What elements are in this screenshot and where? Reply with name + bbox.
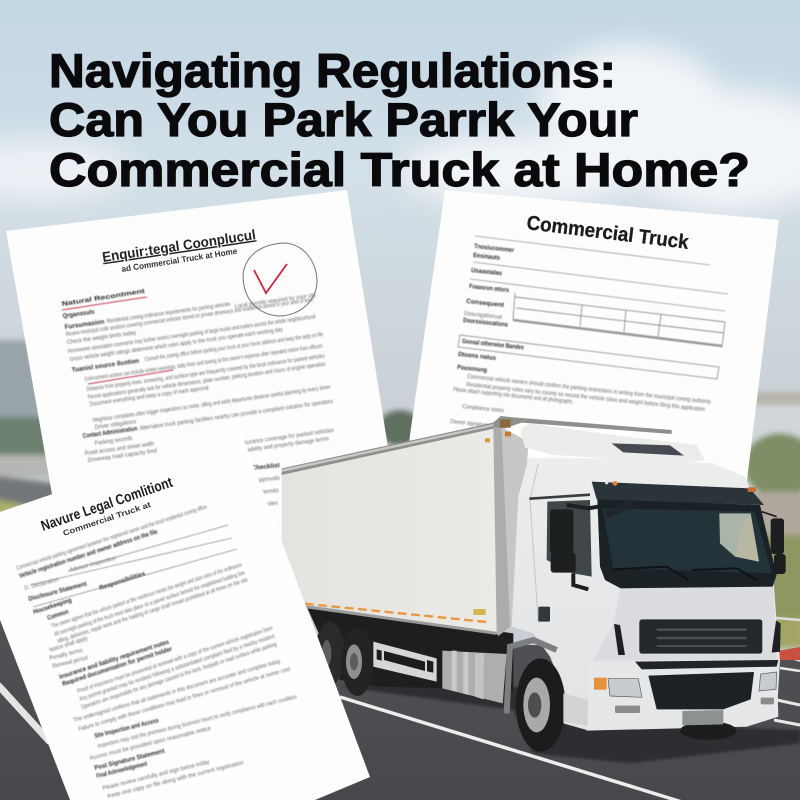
fuel tanks <box>442 651 507 703</box>
body text: sheet clauses: Disclosure Statement <box>28 580 88 603</box>
body text: sheet clauses: Renewal period <box>52 655 88 670</box>
form: rules, labels and table: Commercial vehicle owners should confirm the parking restrictions in writing from the municipal zoning authority <box>467 374 711 406</box>
body text: sheet clauses: Liability and property damage terms <box>244 436 329 454</box>
truck shadow on road <box>340 680 800 763</box>
form: rules, labels and table: Dtoens natus <box>458 351 497 362</box>
body text: sheet clauses <box>16 504 297 800</box>
body text: sheet clauses: Post Signature Statement <box>94 748 166 772</box>
body text: sheet clauses: Checklist <box>251 462 281 472</box>
body text: sheet clauses: Common <box>46 608 70 622</box>
form: rules, labels and table <box>450 236 728 430</box>
body text: sheet clauses: Keep one copy on file along with the current registration <box>107 760 244 800</box>
windshield <box>597 498 777 588</box>
subheading: Commercial Truck at <box>62 500 152 538</box>
upper grille <box>614 619 781 655</box>
title: Commercial Truck at Home? <box>49 143 750 196</box>
document: top left compliance sheet <box>6 190 420 610</box>
form: rules, labels and table: Usaastalas <box>471 267 503 277</box>
body text: sheet clauses: Gross vehicle weight ratings determine which rules apply to the truck you operate each working day <box>69 327 283 363</box>
body text: sheet clauses: Alternative truck parking facilities nearby can provide a compliant solution for operators <box>139 399 333 432</box>
body text: sheet clauses: Please review carefully and sign below today <box>102 760 210 792</box>
cab front panel <box>593 584 777 661</box>
body text: sheet clauses: Site Inspection and Access <box>94 717 160 740</box>
body text: sheet clauses: Commercial vehicle parking agreement between the registered owner and the local residential zoning office <box>16 504 208 572</box>
body text: sheet clauses: Notice shall apply <box>49 636 89 654</box>
body text: sheet clauses: Idling, deliveries, repair work and the loading of cargo shall remain prohibited at all times on the site <box>57 577 249 645</box>
body text: sheet clauses: Inspectors may visit the premises during business hours to verify compliance with each condition <box>97 695 297 750</box>
body text: sheet clauses: D. Declaration <box>24 577 59 592</box>
body text: sheet clauses: Homeowner association covenants may further restrict overnight parking of large trucks and trailers across the whole neighbourhood <box>67 314 316 355</box>
body text: sheet clauses: Housekeeping <box>32 597 73 616</box>
body text: sheet clauses: Contact Administration <box>82 425 138 440</box>
form: rules, labels and table: Tnosiucommer <box>474 243 515 254</box>
sun visor with marker lights <box>592 481 764 505</box>
body text: sheet clauses: Access must be provided upon reasonable notice <box>89 726 212 762</box>
body text: sheet clauses: Operators are responsible for any damage caused to the kerb, footpath or road surface while parking <box>81 642 278 711</box>
body text: sheet clauses: Insurance coverage for parked vehicles <box>239 428 334 447</box>
background: distant hills, trees and roadside <box>0 340 800 648</box>
body text: sheet clauses: Parking records <box>94 436 133 447</box>
headlights, fog lamps and number plate <box>587 667 778 740</box>
form: rules, labels and table: Residential property rules vary by county so record the vehicle class and weight before filing this application <box>466 382 705 413</box>
body text: sheet clauses: Road access and street width <box>84 441 155 457</box>
body text: sheet clauses: Responsibilities <box>98 570 147 592</box>
body text: sheet clauses: Final Acknowledgement <box>96 760 148 780</box>
front wheel <box>507 640 565 752</box>
body text: sheet clauses: Notes <box>264 501 278 508</box>
body text: sheet clauses: Proof of insurance must be presented at renewal with a copy of the current vehicle registration form <box>77 626 274 695</box>
title: Can You Park Parrk Your <box>49 93 638 146</box>
form: rules, labels and table: Pousonung <box>457 364 487 374</box>
cab body <box>512 458 780 730</box>
truck: white commercial box truck <box>282 416 800 763</box>
table <box>513 293 725 347</box>
form: rules, labels and table: Owner signature date <box>450 419 501 430</box>
front bumper <box>563 660 778 731</box>
form: rules, labels and table: Compliance notes <box>462 404 504 414</box>
road <box>0 618 800 800</box>
body text: sheet clauses: Natural Recontment <box>61 288 146 308</box>
roof air deflector <box>521 424 705 462</box>
body text: sheet clauses: Required documentation for permit holder <box>61 646 173 688</box>
body text: sheet clauses: Fursumasion <box>64 318 105 331</box>
body text: sheet clauses: Permit applications generally ask for vehicle dimensions, plate number, parking location and hours of engine operation <box>87 362 326 401</box>
body text: sheet clauses: The undersigned confirms that all statements in this document are accurate and complete today <box>73 659 281 724</box>
cab door seam and trim <box>529 463 590 623</box>
form: rules, labels and table: Consequent <box>466 298 505 309</box>
body text: sheet clauses: Neighbour complaints often trigger inspections so noise, idling and early departures deserve careful planning by every driver <box>92 385 331 424</box>
body text: sheet clauses: Document everything and keep a copy of each approval <box>89 385 209 408</box>
body text: sheet clauses: Penalty terms <box>49 648 83 662</box>
body text: sheet clauses: Consult the zoning office before parking your truck at your home address and keep the reply on file <box>144 332 324 363</box>
body text: sheet clauses: Failure to comply with these conditions may lead to fines or removal of the vehicle at owner cost <box>78 666 291 733</box>
form: rules, labels and table: Please attach supporting site documents and all photographs <box>453 387 573 406</box>
cargo box <box>282 416 672 636</box>
body text: sheet clauses: Driver obligations <box>94 419 137 431</box>
side window and mirror <box>547 500 627 589</box>
heading: sheet title: Navure Legal Comlitiont <box>39 475 175 535</box>
form: rules, labels and table: Dsorssisocations <box>463 317 509 329</box>
body text: sheet clauses: Review municipal code sections covering commercial vehicles stored on private driveways and residential streets in your area of town <box>65 297 314 338</box>
body text: sheet clauses: The owner agrees that the vehicle parked at the residence meets the weight and size rules of the ordinance <box>51 562 243 630</box>
document: top right commercial truck form <box>400 190 779 540</box>
subheading: ad Commercial Truck at Home <box>121 246 238 274</box>
body text: sheet clauses: Tuanisl source Ilustion <box>71 358 140 374</box>
form: rules, labels and table: Foaasrun ottors <box>469 283 510 294</box>
right mirror <box>762 512 786 574</box>
body text: sheet clauses: Distance from property lines, screening, and surface type are frequently covered by the local ordinance for parked vehicles <box>86 354 325 393</box>
heading: sheet title: Enquir:tegal Coonplucul <box>101 226 257 265</box>
body text: sheet clauses <box>61 288 334 508</box>
title: Navigating Regulations: <box>49 44 616 97</box>
rear wheels <box>315 622 373 696</box>
form: rules, labels and table: Doscrigationsat <box>464 311 503 321</box>
body text: sheet clauses: Residential zoning ordinance requirements for parking vehicles <box>106 302 231 325</box>
body text: sheet clauses: Local permits required by your city <box>234 293 316 310</box>
body text: sheet clauses: All overnight parking of the truck must take place on a paved surface behind the established building line <box>54 570 246 638</box>
title <box>49 44 750 196</box>
body text: sheet clauses: Permits <box>260 488 279 496</box>
chassis underside <box>307 607 513 690</box>
body text: sheet clauses: Vehicle registration number and owner address on the file <box>18 528 159 580</box>
icon: circled red check mark <box>243 243 317 316</box>
heading: form title: Commercial Truck <box>525 212 691 254</box>
body text: sheet clauses: Qrganssuls <box>62 309 95 320</box>
body text: sheet clauses: Advisor Inspection <box>69 556 117 574</box>
form: rules, labels and table: Gonsal otherwise Bandes <box>462 338 524 352</box>
body text: sheet clauses: Enforcement actions can include written warnings, daily fines and towing at the owner's expense after repeated notice from officers <box>84 344 323 383</box>
document: front left legal commitment sheet <box>0 430 370 800</box>
side guard <box>373 642 437 682</box>
body text: sheet clauses: Any permit granted may be revoked following a substantiated complaint filed by a nearby resident <box>79 634 276 703</box>
body text: sheet clauses: Check the weight limits today <box>66 330 137 346</box>
body text: sheet clauses: Driveway load capacity limit <box>87 448 158 464</box>
form: rules, labels and table: Eesinauts <box>473 252 501 262</box>
body text: sheet clauses: Insurance and liability requirement notes <box>58 639 170 681</box>
body text: sheet clauses: Approvals <box>256 476 280 484</box>
